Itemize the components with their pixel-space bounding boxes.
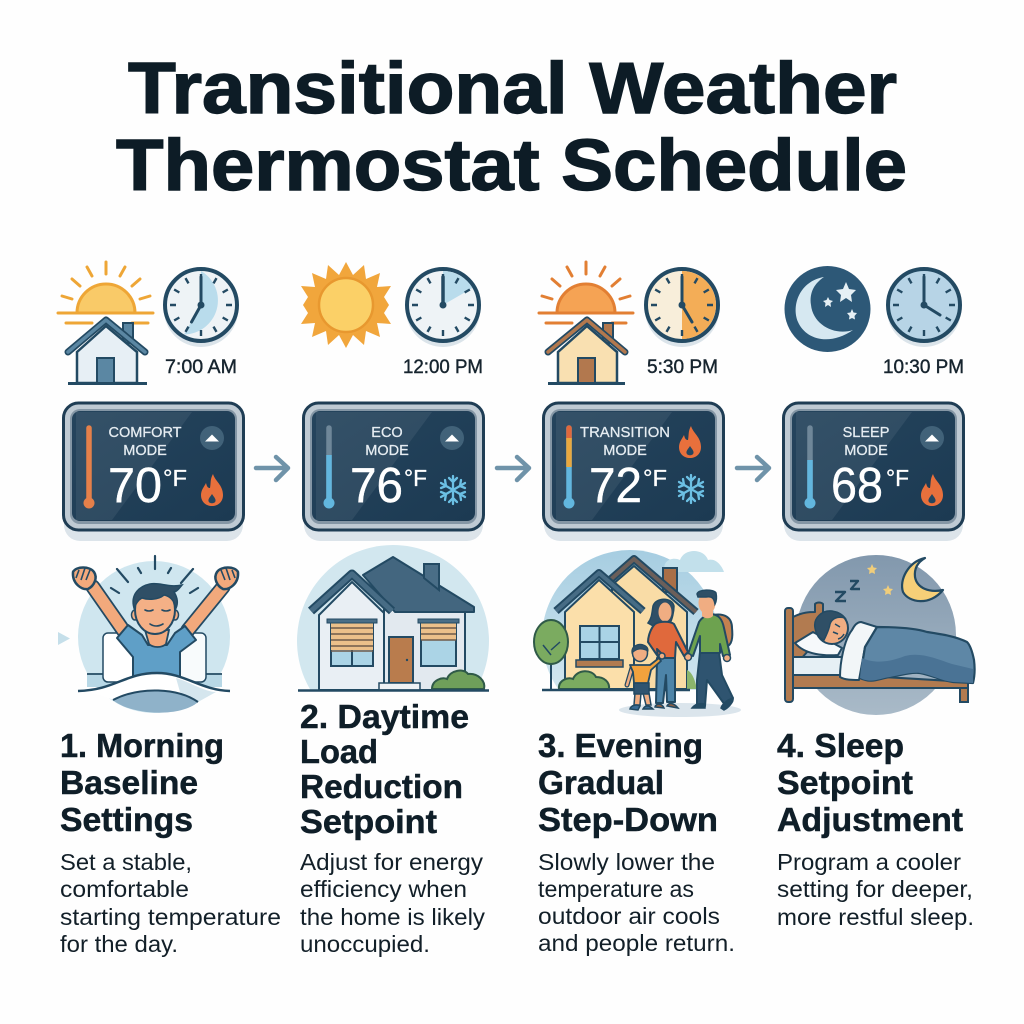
thermostat: sleep mode: SLEEP (843, 425, 889, 441)
illustration: person waking and stretching (58, 556, 238, 713)
step 4 description: more restful sleep. (777, 904, 974, 930)
step 2 heading: Reduction (300, 769, 463, 806)
arrow to step 2 (256, 457, 288, 480)
thermostat: transition mode (544, 403, 724, 541)
icon: sunrise over house (58, 262, 153, 384)
step 1 description: for the day. (60, 931, 178, 957)
time label: 10:30 PM (883, 357, 964, 378)
step 2 description: efficiency when (300, 876, 467, 902)
illustration: family returning home (534, 550, 741, 726)
icon: clock 7:00 (164, 269, 238, 347)
thermostat: transition mode: MODE (603, 443, 647, 459)
panel: step 4 sleep (777, 266, 975, 930)
step 3 heading (538, 728, 718, 839)
step 3 description: temperature as (538, 876, 694, 902)
step 3 description (538, 849, 735, 956)
step 3 heading: Gradual (538, 765, 664, 802)
step 2 description: Adjust for energy (300, 849, 483, 875)
step 4 description: setting for deeper, (777, 876, 973, 902)
thermostat: comfort mode: 70 (108, 459, 162, 513)
step 1 heading: Settings (60, 802, 193, 839)
step 4 heading: Adjustment (777, 802, 963, 839)
figure: woman (648, 599, 688, 708)
step 1 description: Set a stable, (60, 849, 192, 875)
thermostat: transition mode: °F (643, 465, 667, 491)
step 4 heading (777, 728, 963, 839)
step 2 description: unoccupied. (300, 931, 430, 957)
arrow to step 3 (497, 457, 529, 480)
illustration: house with shades (297, 545, 489, 692)
step 1 description (60, 849, 281, 957)
step 3 heading: 3. Evening (538, 728, 703, 765)
thermostat: comfort mode (64, 403, 244, 541)
thermostat: eco mode: °F (404, 465, 427, 491)
time label: 7:00 AM (165, 357, 237, 378)
title: Thermostat Schedule (116, 126, 907, 206)
step 4 heading: Setpoint (777, 765, 913, 802)
icon: midday sun (301, 262, 391, 348)
icon: sunset over house (539, 262, 633, 384)
thermostat: eco mode: ECO (371, 425, 403, 441)
step 4 description: Program a cooler (777, 849, 961, 875)
figure: man with backpack (684, 590, 733, 710)
thermostat: eco mode: MODE (365, 443, 409, 459)
title (116, 49, 907, 206)
step 1 description: comfortable (60, 876, 189, 902)
icon: clock 12:00 (406, 269, 480, 347)
thermostat: comfort mode: °F (163, 465, 187, 491)
step 4 description (777, 849, 974, 930)
thermostat: sleep mode: 68 (831, 459, 883, 513)
thermostat: transition mode: 72 (589, 459, 642, 513)
step 1 description: starting temperature (60, 904, 281, 930)
panel: step 3 evening (534, 262, 769, 956)
thermostat: comfort mode: MODE (123, 443, 167, 459)
step 3 description: Slowly lower the (538, 849, 715, 875)
step 2 heading: Load (300, 734, 378, 771)
title: Transitional Weather (128, 49, 897, 129)
thermostat: comfort mode: COMFORT (108, 425, 182, 441)
step 3 description: outdoor air cools (538, 903, 720, 929)
time label: 5:30 PM (647, 357, 718, 378)
step 2 heading (300, 699, 469, 841)
icon: moon and stars (784, 266, 870, 352)
figure: child (627, 644, 661, 710)
thermostat: transition mode: TRANSITION (580, 425, 670, 441)
panel: step 1 morning (58, 262, 288, 957)
illustration: person sleeping in bed (785, 555, 975, 715)
step 3 description: and people return. (538, 930, 735, 956)
icon: clock 5:30 (645, 269, 719, 347)
thermostat: sleep mode: MODE (844, 443, 888, 459)
step 1 heading (60, 728, 224, 839)
step 2 description (300, 849, 485, 957)
step 4 heading: 4. Sleep (777, 728, 904, 765)
panel: step 2 daytime (297, 262, 529, 957)
thermostat: sleep mode: °F (886, 465, 909, 491)
thermostat: sleep mode (784, 403, 964, 541)
icon: clock 10:30 (887, 269, 961, 347)
thermostat: eco mode (304, 403, 484, 541)
step 2 heading: 2. Daytime (300, 699, 469, 736)
arrow to step 4 (737, 457, 769, 480)
step 3 heading: Step-Down (538, 802, 718, 839)
step 1 heading: Baseline (60, 765, 198, 802)
thermostat: eco mode: 76 (350, 459, 403, 513)
step 2 description: the home is likely (300, 904, 485, 930)
time label: 12:00 PM (403, 357, 483, 378)
step 2 heading: Setpoint (300, 804, 437, 841)
step 1 heading: 1. Morning (60, 728, 224, 765)
